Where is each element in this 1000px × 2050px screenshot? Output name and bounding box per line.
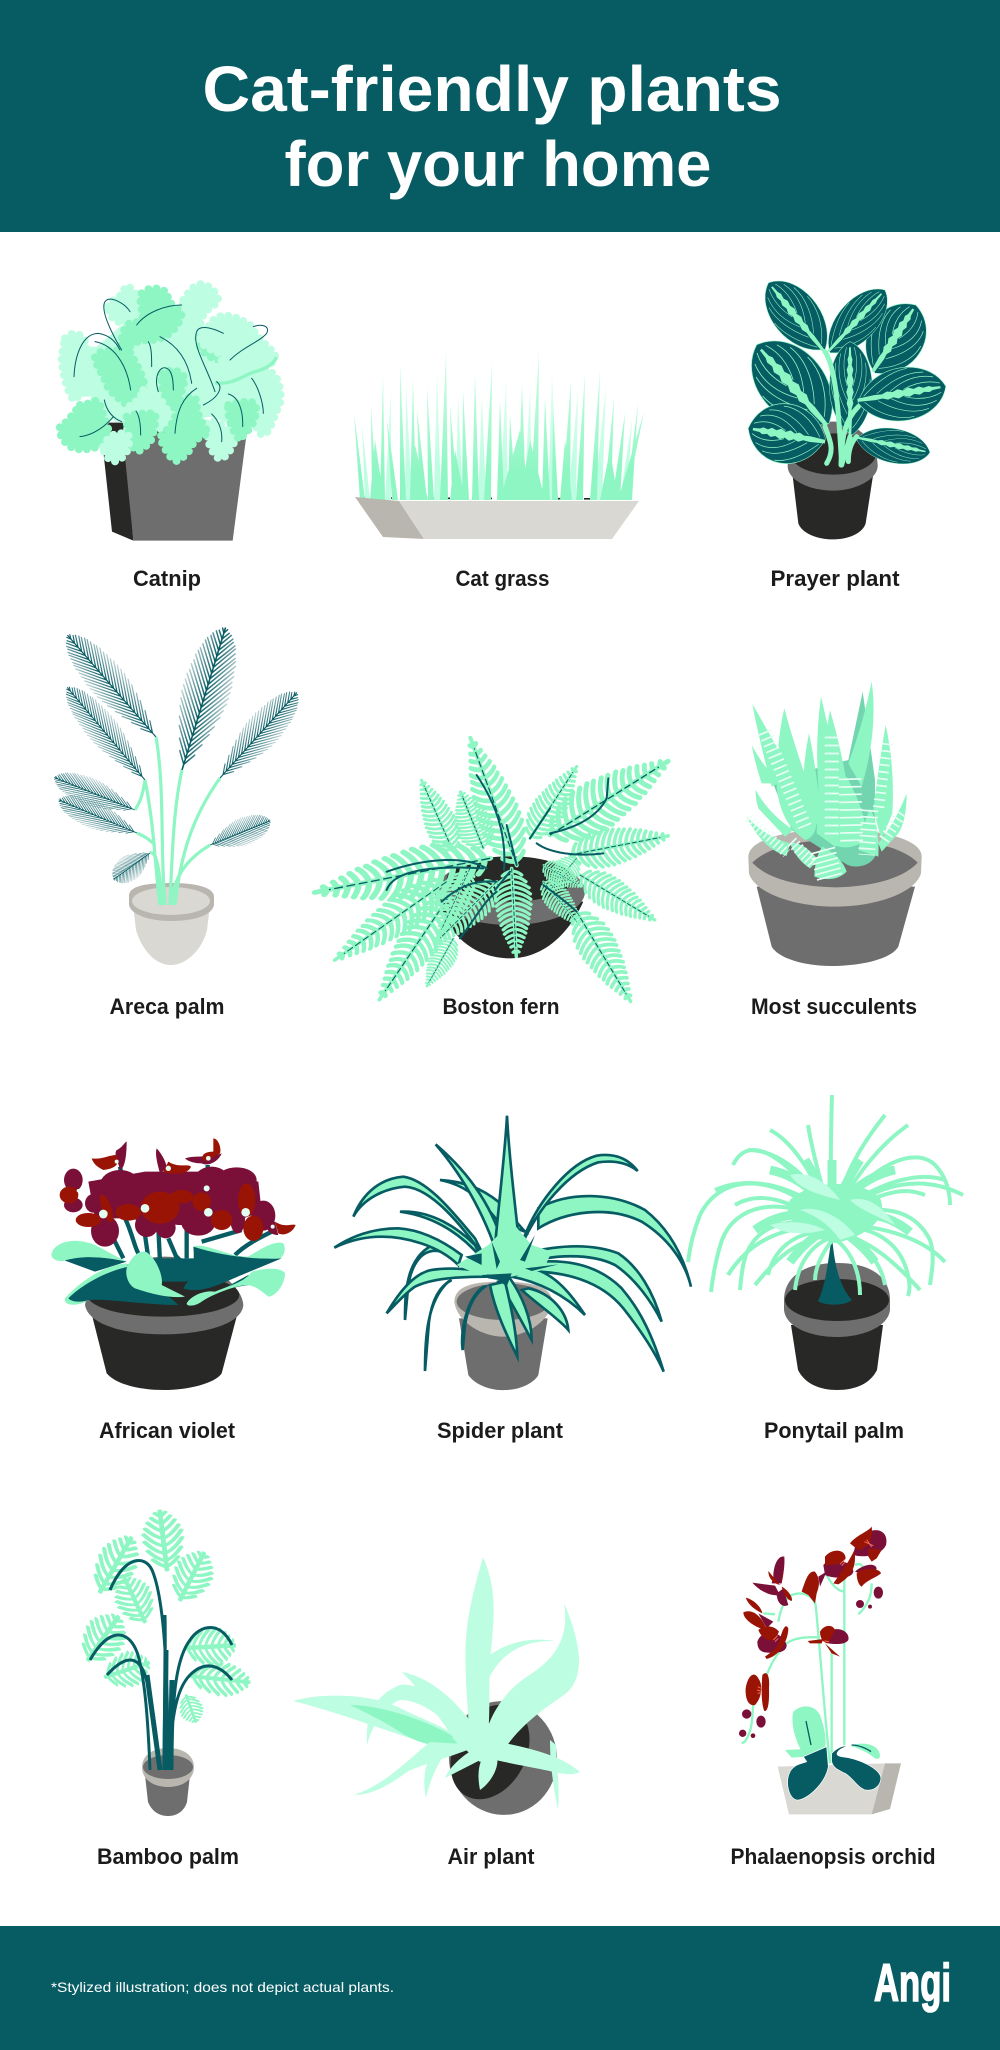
logo: Angi: Angi — [874, 1954, 951, 2013]
spider plant illustration — [334, 1116, 691, 1390]
label: catnip: Catnip — [133, 566, 201, 591]
catnip illustration — [60, 284, 281, 541]
label: most succulents: Most succulents — [751, 994, 917, 1019]
ponytail pot — [784, 1263, 890, 1390]
title: for your home — [284, 128, 712, 200]
areca stems — [135, 737, 220, 905]
title — [202, 53, 782, 200]
bamboo stems — [90, 1560, 232, 1770]
label: phalaenopsis orchid: Phalaenopsis orchid — [730, 1844, 936, 1869]
header band — [0, 0, 1000, 232]
label: bamboo palm: Bamboo palm — [97, 1844, 239, 1869]
air plant holder — [435, 1691, 566, 1824]
label: air plant: Air plant — [448, 1844, 535, 1869]
tray — [355, 497, 639, 539]
label: ponytail palm: Ponytail palm — [764, 1418, 904, 1443]
ponytail crown — [755, 1160, 910, 1262]
bamboo leaflets — [73, 1509, 251, 1726]
plant: prayer plant — [733, 268, 950, 591]
areca pot — [129, 883, 214, 965]
label: boston fern: Boston fern — [442, 994, 560, 1019]
title: Cat-friendly plants — [202, 53, 782, 125]
ponytail thin strands — [688, 1095, 963, 1296]
soil line — [360, 498, 636, 499]
label: areca palm: Areca palm — [110, 994, 224, 1019]
plant: phalaenopsis orchid — [730, 1527, 936, 1869]
succulent illustration — [747, 682, 922, 966]
plant: bamboo palm — [73, 1509, 251, 1869]
footer band — [0, 1926, 1000, 2050]
boston fern illustration — [310, 731, 681, 1011]
footnote: *Stylized illustration; does not depict actual plants. — [51, 1979, 394, 1995]
plant: spider plant — [334, 1116, 691, 1443]
plant: cat grass — [354, 350, 644, 591]
plant: african violet — [51, 1138, 296, 1443]
plant: ponytail palm — [688, 1095, 963, 1443]
plant: areca palm — [49, 621, 310, 1019]
label: african violet: African violet — [99, 1418, 236, 1443]
label: cat grass: Cat grass — [456, 566, 550, 591]
african violet illustration — [51, 1138, 296, 1390]
prayer plant illustration — [733, 268, 950, 539]
orchid illustration — [739, 1527, 901, 1814]
bamboo pot — [142, 1748, 194, 1816]
ponytail trunk — [818, 1236, 852, 1305]
grass blades — [354, 350, 644, 500]
label: spider plant: Spider plant — [437, 1418, 564, 1443]
air plant leaves — [293, 1557, 580, 1810]
plant: boston fern — [310, 731, 681, 1019]
label: prayer plant: Prayer plant — [770, 566, 900, 591]
areca fronds — [49, 621, 310, 890]
plant: air plant — [293, 1557, 580, 1869]
plant: most succulents — [747, 682, 922, 1019]
plant: catnip — [60, 284, 281, 591]
